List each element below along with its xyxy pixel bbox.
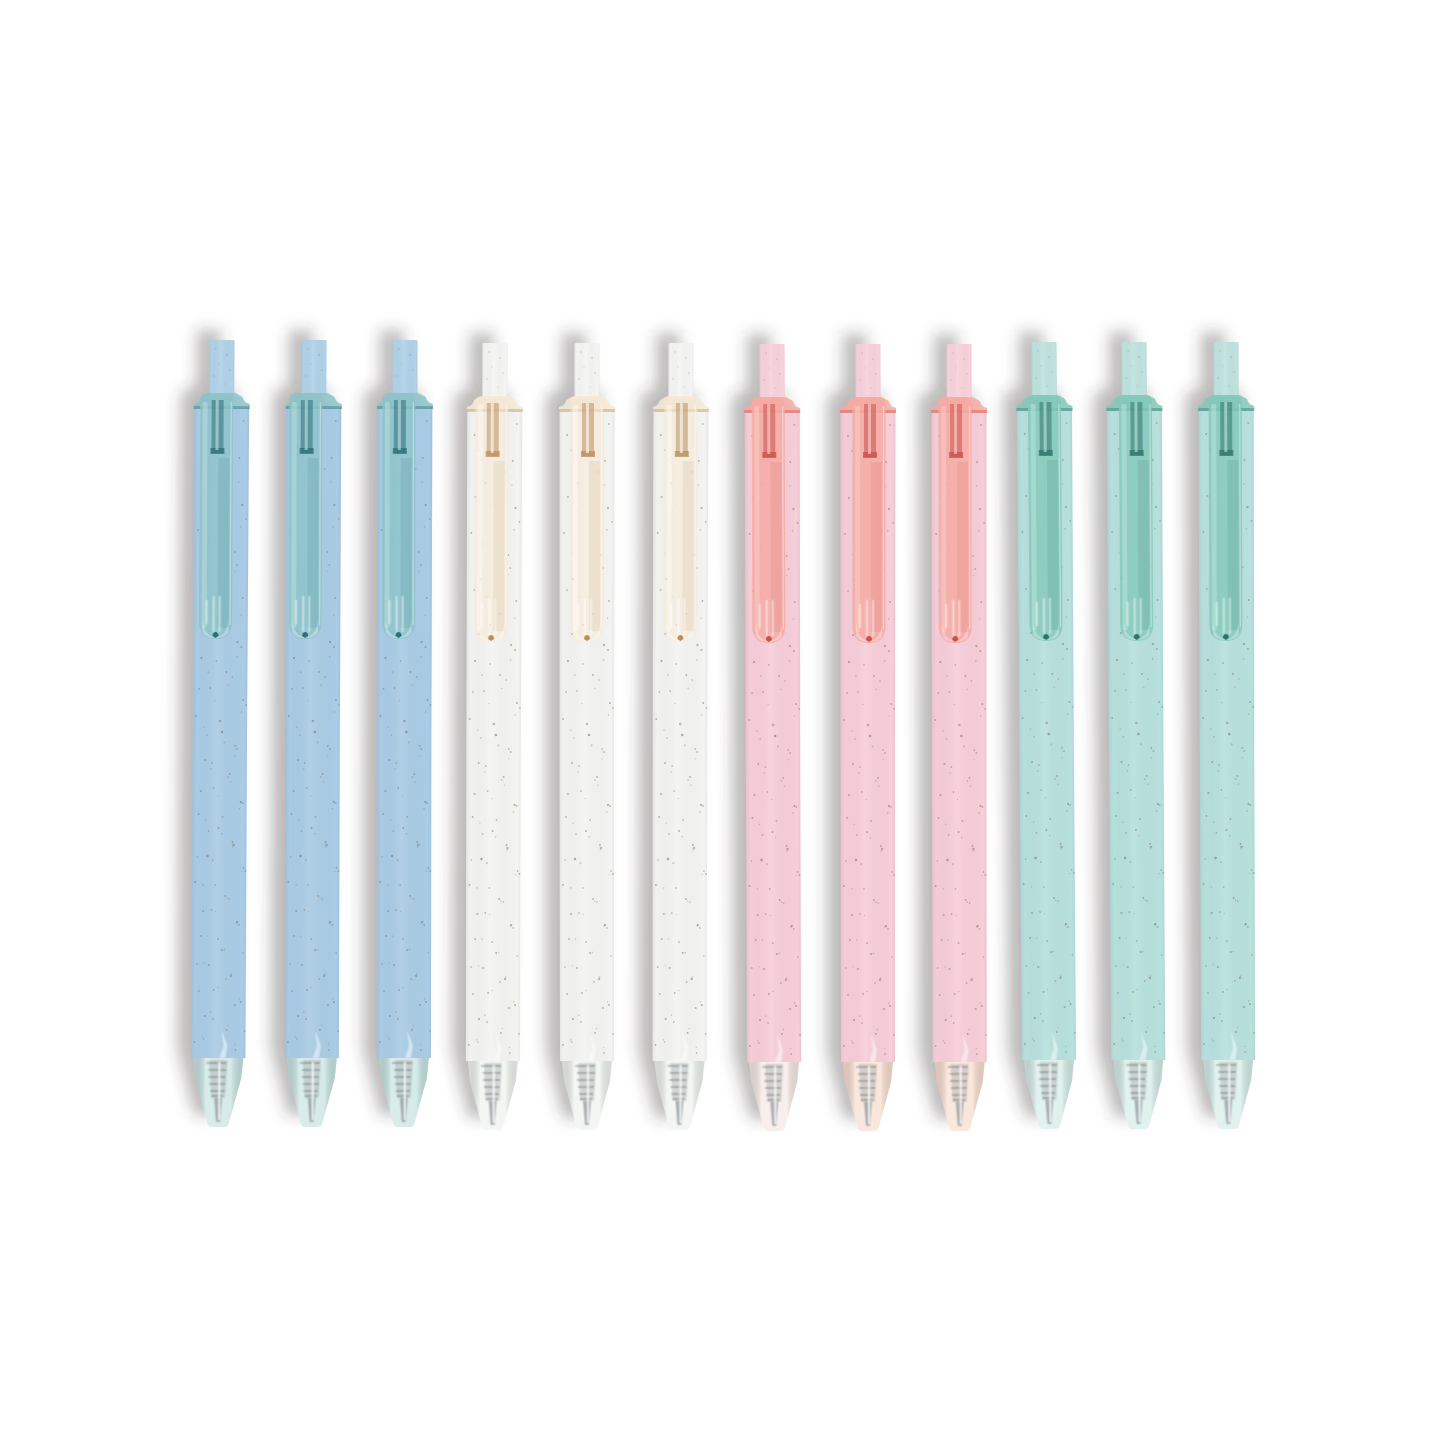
pen 3: blue	[376, 340, 433, 1127]
pen 7: pink	[744, 344, 802, 1131]
pen 5: white	[559, 343, 615, 1130]
pen 8: pink	[840, 344, 896, 1131]
pen 4: white	[465, 343, 523, 1130]
pen 6: white	[651, 343, 709, 1130]
pen 1: blue	[190, 340, 250, 1127]
pen 11: mint	[1106, 342, 1167, 1129]
soft shadows cast up and left by the pens	[177, 330, 1243, 1119]
pen 10: mint	[1016, 342, 1078, 1129]
pen 2: blue	[284, 340, 342, 1127]
pen 12: mint	[1198, 342, 1256, 1129]
pen 9: pink	[931, 344, 988, 1131]
